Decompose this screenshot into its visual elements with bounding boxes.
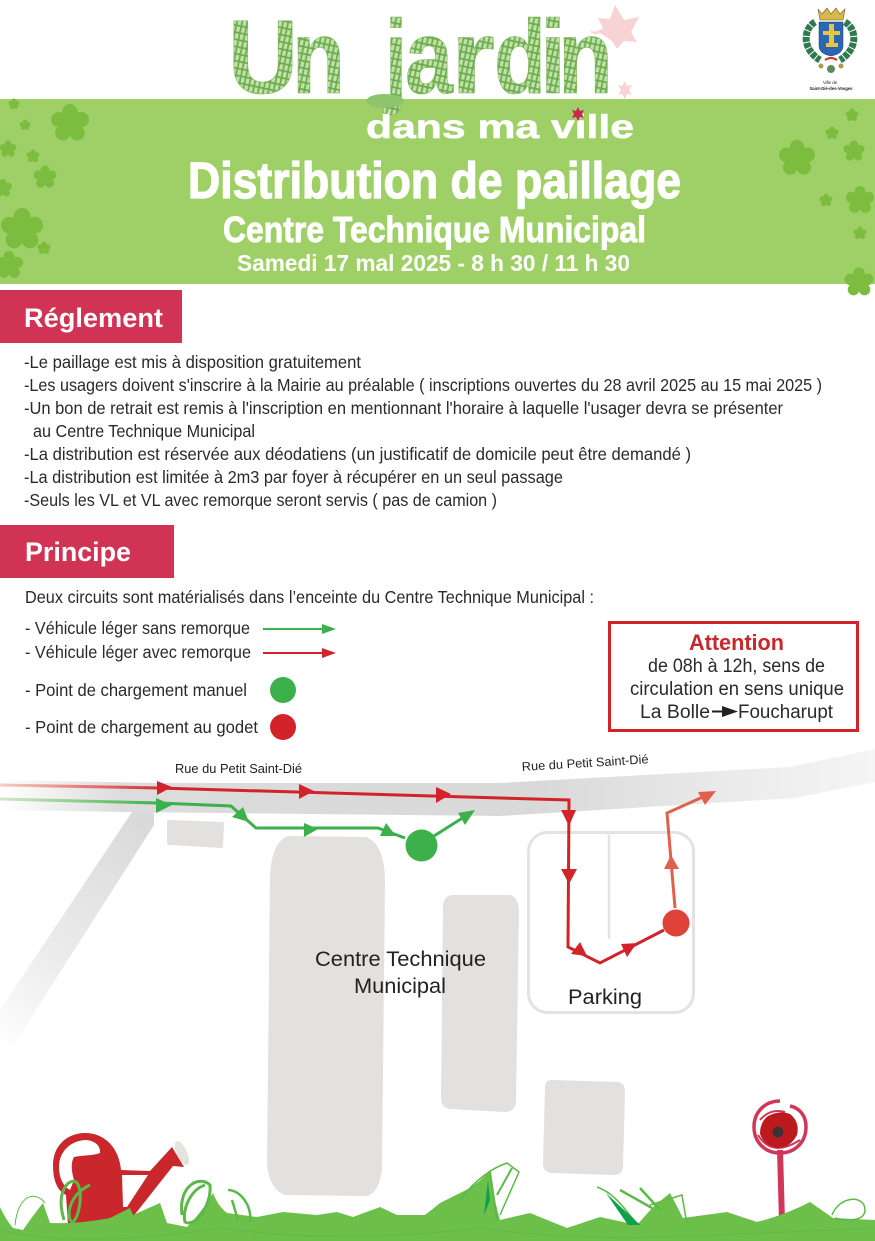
building: Centre Technique Municipal main [267,836,385,1196]
heading: Centre Technique Municipal: Centre Technique Municipal [223,209,646,250]
grass [0,1163,875,1241]
route: red circuit [0,781,716,963]
date and time: Samedi 17 mal 2025 - 8 h 30 / 11 h 30 [237,250,630,276]
heading: Réglement [0,290,182,343]
crest: Saint-Dié-des-Vosges: Ville de [823,80,838,85]
text block: rules: -La distribution est réservée aux déodatiens (un justificatif de domicile peut être demandé ) [24,444,691,464]
text block: rules [24,352,822,510]
callout: Attention: La Bolle [640,702,710,723]
route: green circuit [0,798,475,862]
text block: rules: -Seuls les VL et VL avec remorque seront servis ( pas de camion ) [24,490,497,510]
map: site plan [0,749,875,1196]
legend: manual loading point: - Point de chargement manuel [25,680,247,700]
building: small [167,820,224,848]
label: Rue du Petit Saint-Dié left: Rue du Petit Saint-Dié [175,762,302,776]
text: circuits intro: Deux circuits sont matérialisés dans l’enceinte du Centre Technique Municipal : [25,587,594,607]
icon: pink star [618,81,632,99]
label: Centre Technique Municipal: Municipal [354,975,446,998]
building: central [441,895,519,1112]
crest: Saint-Dié-des-Vosges [806,8,854,91]
heading: Distribution de paillage: Distribution de paillage [188,152,681,209]
text block: rules: -Un bon de retrait est remis à l'inscription en mentionnant l'horaire à laquelle l'usager devra se présenter [24,398,783,418]
callout: Attention: Attention [689,630,784,655]
title: Un jardin: i [540,0,566,116]
legend: manual loading point [25,677,296,703]
title: Un jardin: r [451,0,495,116]
icon: pink maple leaf [590,5,639,49]
label: Centre Technique Municipal [315,948,486,998]
heading: Principe [0,525,174,578]
road [0,749,875,1058]
legend: red arrow: - Véhicule léger avec remorque [25,642,251,662]
icon: watering can [53,1133,192,1225]
grass scribbles [0,1163,875,1239]
heading: Principe: Principe [25,537,131,567]
text block: rules: -La distribution est limitée à 2m3 par foyer à récupérer en un seul passage [24,467,563,487]
callout: Attention: circulation en sens unique [630,679,844,700]
label: Centre Technique Municipal: Centre Technique [315,948,486,971]
subtitle: dans ma ville: dans ma ville [366,108,634,145]
title: Un jardin: j [383,0,407,116]
title: Un jardin: d [494,0,546,116]
text block: rules: -Le paillage est mis à disposition gratuitement [24,352,361,372]
label: Parking: Parking [568,986,642,1009]
title: Un jardin: a [405,0,454,116]
title: Un jardin: n [558,0,613,116]
panel: green header band [0,98,875,284]
building: lower [543,1080,625,1175]
callout: Attention: Foucharupt [738,702,834,723]
label: Rue du Petit Saint-Dié right: Rue du Petit Saint-Dié [521,752,649,774]
crest: Saint-Dié-des-Vosges: Saint-Dié-des-Vosges [810,86,853,91]
legend: bucket loading point: - Point de chargement au godet [25,717,258,737]
text block: rules: -Les usagers doivent s'inscrire à la Mairie au préalable ( inscriptions ouvertes du 28 avril 2025 au 15 mai 2025 ) [24,375,822,395]
callout: Attention [610,622,858,730]
title: Un jardin [228,0,613,116]
icon: poppy [754,1101,806,1222]
legend [25,618,336,740]
clover decorations [0,98,874,278]
callout: Attention: de 08h à 12h, sens de [648,656,825,677]
legend: bucket loading point [25,714,296,740]
heading: Réglement: Réglement [24,303,163,333]
parking lot [528,832,694,1012]
title: Un jardin: n [292,0,345,116]
icon: clover overlapping band edge [844,268,874,295]
legend: green arrow: - Véhicule léger sans remorque [25,618,250,638]
text block: rules: au Centre Technique Municipal [33,421,255,441]
title: Un jardin: U [228,0,298,116]
